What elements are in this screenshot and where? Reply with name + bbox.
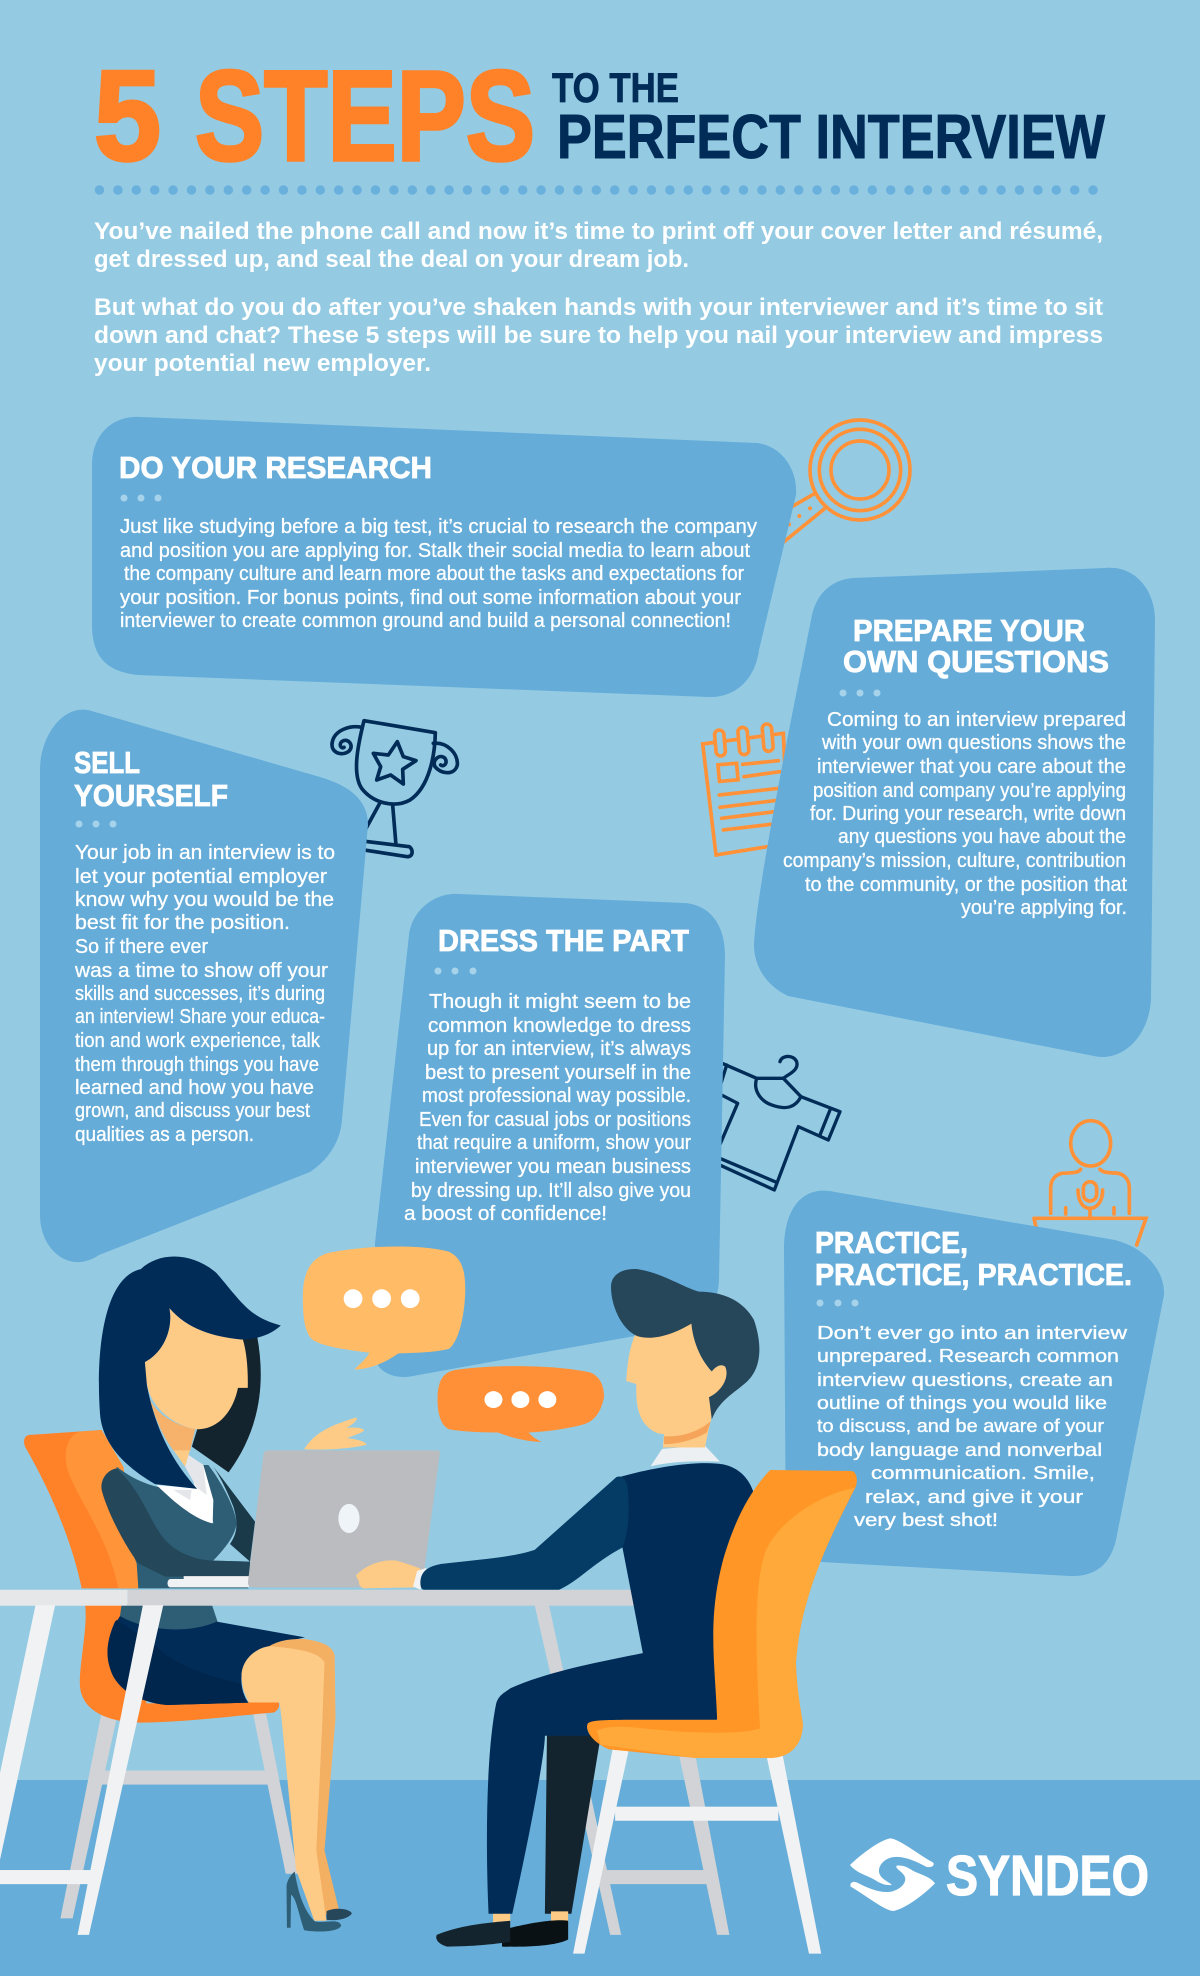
body text: practice: unprepared. Research common <box>817 1346 1119 1366</box>
icon: magnifying glass <box>780 420 910 545</box>
intro text: down and chat? These 5 steps will be sure to help you nail your interview and impress <box>94 322 1103 349</box>
body text: practice: interview questions, create an <box>817 1370 1113 1390</box>
heading: practice: PRACTICE, PRACTICE. <box>815 1257 1132 1292</box>
body text: prepare your own questions: to the community, or the position that <box>805 874 1127 896</box>
table <box>0 1590 634 1935</box>
body text: dress the part: Though it might seem to be <box>429 991 691 1013</box>
intro text: But what do you do after you’ve shaken hands with your interviewer and it’s time to sit <box>94 294 1103 321</box>
body text: sell yourself: was a time to show off your <box>74 960 328 982</box>
intro text <box>94 218 1103 377</box>
title: STEPS <box>195 45 535 188</box>
logo wordmark: SYNDEO <box>946 1844 1149 1908</box>
panel: do your research <box>92 417 796 697</box>
body text: dress the part: most professional way possible. <box>422 1085 691 1107</box>
body text: do your research: Just like studying before a big test, it’s crucial to research the company <box>120 516 757 538</box>
hair back <box>192 1336 261 1472</box>
panel: practice <box>784 1191 1164 1576</box>
heading: practice: PRACTICE, <box>815 1225 968 1260</box>
body text: dress the part: up for an interview, it’s always <box>427 1038 691 1060</box>
logo <box>850 1838 1149 1911</box>
man's socks <box>493 1911 568 1923</box>
heading: sell yourself: YOURSELF <box>74 778 228 813</box>
intro text: get dressed up, and seal the deal on your dream job. <box>94 246 689 273</box>
body text: practice: body language and nonverbal <box>817 1440 1102 1460</box>
body text: prepare your own questions: position and company you’re applying <box>813 780 1126 802</box>
lower body <box>107 1604 305 1705</box>
title: 5 <box>94 45 161 188</box>
leg shade <box>269 1639 339 1916</box>
body text: sell yourself: Your job in an interview is to <box>75 842 335 864</box>
heading: prepare your own questions: OWN QUESTIONS <box>843 644 1109 679</box>
heading: sell yourself <box>74 745 228 813</box>
body text: prepare your own questions: company’s mission, culture, contribution <box>783 850 1126 872</box>
body text: prepare your own questions: for. During your research, write down <box>810 803 1126 825</box>
body text: practice: to discuss, and be aware of your <box>817 1416 1104 1436</box>
heading: practice <box>815 1225 1132 1292</box>
body text: do your research: your position. For bonus points, find out some information about your <box>120 587 741 609</box>
body text: sell yourself: best fit for the position. <box>75 912 290 934</box>
icon: speaker at podium <box>1034 1121 1146 1245</box>
body text: do your research: the company culture and learn more about the tasks and expectations for <box>124 563 744 585</box>
body text: sell yourself: So if there ever <box>75 936 208 958</box>
speech bubble: orange <box>438 1366 604 1442</box>
man's chair: back and seat <box>587 1470 857 1758</box>
hand raised <box>304 1417 367 1450</box>
body text: dress the part: Even for casual jobs or positions <box>419 1109 691 1131</box>
body text: practice <box>817 1323 1128 1530</box>
face <box>129 1308 248 1429</box>
woman's chair: rear legs <box>60 1709 298 1918</box>
torso <box>101 1450 255 1588</box>
body text: practice: Don’t ever go into an interview <box>817 1323 1128 1343</box>
body text: dress the part: that require a uniform, show your <box>417 1132 691 1154</box>
man's shoes <box>436 1920 568 1947</box>
body text: do your research <box>120 516 757 632</box>
man's neck and head <box>611 1269 759 1466</box>
man: torso and near leg <box>487 1463 754 1914</box>
body text: prepare your own questions <box>783 709 1127 919</box>
panel: dress the part <box>375 894 725 1377</box>
icon: shirt on hanger <box>718 1056 840 1190</box>
body text: sell yourself: qualities as a person. <box>75 1124 254 1146</box>
man's arm <box>420 1476 629 1590</box>
shoe far <box>327 1909 352 1920</box>
body text: prepare your own questions: any questions you have about the <box>838 826 1126 848</box>
title <box>94 45 1105 188</box>
icon: trophy <box>332 721 457 857</box>
intro text: your potential new employer. <box>94 350 431 377</box>
body text: sell yourself: tion and work experience, talk <box>75 1030 321 1052</box>
leg <box>242 1646 327 1921</box>
keyboard <box>168 1576 249 1587</box>
body text: dress the part: by dressing up. It’ll also give you <box>411 1180 691 1202</box>
shoe near <box>287 1871 341 1932</box>
body text: dress the part: common knowledge to dress <box>428 1015 691 1037</box>
body text: sell yourself: grown, and discuss your best <box>75 1100 310 1122</box>
man's hand <box>356 1560 420 1588</box>
heading: prepare your own questions <box>843 613 1109 679</box>
body text: practice: outline of things you would like <box>817 1393 1107 1413</box>
body text: prepare your own questions: Coming to an interview prepared <box>827 709 1126 731</box>
body text: dress the part <box>404 991 691 1225</box>
man's chair: rear legs <box>607 1752 729 1935</box>
intro text: You’ve nailed the phone call and now it’s time to print off your cover letter and résumé, <box>94 218 1103 245</box>
title: TO THE <box>552 64 679 111</box>
illustration: interview scene <box>0 1246 857 1954</box>
body text: do your research: interviewer to create common ground and build a personal connection! <box>120 610 731 632</box>
woman's chair: back and seat <box>24 1430 279 1723</box>
man's chair: front legs <box>573 1747 821 1954</box>
body text: sell yourself: learned and how you have <box>75 1077 314 1099</box>
laptop <box>248 1450 440 1587</box>
body text: sell yourself: them through things you have <box>75 1054 319 1076</box>
body text: dress the part: best to present yourself in the <box>425 1062 691 1084</box>
heading: sell yourself: SELL <box>74 745 140 780</box>
hair front <box>99 1257 281 1489</box>
body text: practice: very best shot! <box>854 1510 998 1530</box>
body text: dress the part: interviewer you mean business <box>415 1156 691 1178</box>
man: far leg <box>545 1735 601 1914</box>
body text: practice: relax, and give it your <box>865 1487 1083 1507</box>
logo mark <box>850 1838 935 1911</box>
body text: practice: communication. Smile, <box>871 1463 1095 1483</box>
body text: sell yourself: an interview! Share your educa- <box>75 1006 325 1028</box>
body text: prepare your own questions: with your own questions shows the <box>821 732 1126 754</box>
body text: sell yourself: skills and successes, it’s during <box>75 983 325 1005</box>
icon: notepad <box>703 724 793 855</box>
title: PERFECT INTERVIEW <box>557 103 1105 172</box>
man's cuff <box>413 1568 427 1590</box>
body text: sell yourself: let your potential employer <box>75 866 327 888</box>
neck <box>149 1397 195 1450</box>
table: rear right leg <box>535 1605 621 1935</box>
woman: figure <box>99 1257 352 1932</box>
body text: prepare your own questions: you’re applying for. <box>961 897 1127 919</box>
heading: prepare your own questions: PREPARE YOUR <box>853 613 1085 648</box>
heading: do your research: DO YOUR RESEARCH <box>119 450 432 485</box>
body text: do your research: and position you are applying for. Stalk their social media to learn about <box>120 540 750 562</box>
panel: prepare your own questions <box>754 568 1155 1057</box>
panel: sell yourself <box>40 710 368 1262</box>
body text: prepare your own questions: interviewer that you care about the <box>817 756 1126 778</box>
body text: sell yourself: know why you would be the <box>75 889 334 911</box>
body text: dress the part: a boost of confidence! <box>404 1203 607 1225</box>
body text: sell yourself <box>74 842 335 1146</box>
speech bubble: light orange <box>303 1246 465 1370</box>
heading: dress the part: DRESS THE PART <box>438 923 689 958</box>
floor <box>0 1780 1200 1976</box>
